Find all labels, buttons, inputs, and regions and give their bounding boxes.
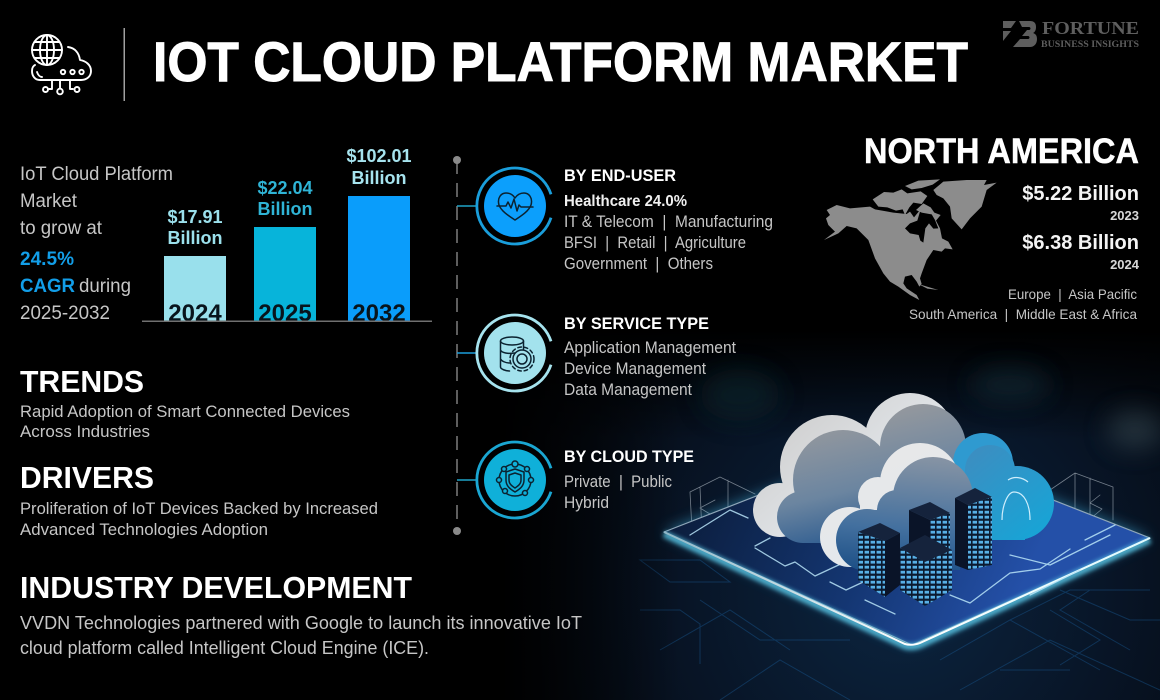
text: by cloud type: Private | Public bbox=[564, 472, 672, 491]
industry development: VVDN Technologies partnered with Google to launch its innovative IoT bbox=[20, 613, 582, 633]
text: by cloud type: BY CLOUD TYPE bbox=[564, 447, 694, 466]
stat: 2023: 2023 bbox=[1110, 208, 1139, 223]
platform bbox=[664, 440, 1150, 647]
server tower front bbox=[900, 535, 952, 606]
server tower left bbox=[858, 523, 900, 597]
server tower right bbox=[955, 488, 992, 570]
drivers bbox=[20, 460, 378, 539]
text: by service type: Data Management bbox=[564, 380, 692, 399]
circuit traces bbox=[690, 510, 1115, 614]
logo: Fortune Business Insights bbox=[1003, 18, 1139, 50]
text: by cloud type bbox=[564, 447, 694, 512]
bar chart: market size bbox=[142, 146, 432, 327]
heading: north america: NORTH AMERICA bbox=[864, 132, 1139, 171]
bar 2032 bbox=[348, 196, 410, 327]
value 2032: Billion bbox=[352, 168, 406, 188]
industry development: cloud platform called Intelligent Cloud Engine (ICE). bbox=[20, 638, 429, 658]
stat: 2023: $5.22 Billion bbox=[1022, 183, 1139, 205]
value 2025: $22.04 bbox=[257, 178, 313, 198]
industry development: INDUSTRY DEVELOPMENT bbox=[20, 570, 412, 605]
stat: 2024: $6.38 Billion bbox=[1022, 232, 1139, 254]
illustration: cloud platform bbox=[664, 393, 1150, 647]
growth text block: CAGR bbox=[20, 276, 75, 297]
text: by end-user: Government | Others bbox=[564, 254, 713, 273]
stat: 2024 bbox=[1022, 232, 1140, 272]
bar 2024: 2024 bbox=[168, 300, 222, 327]
drivers: Advanced Technologies Adoption bbox=[20, 520, 268, 539]
map: north america bbox=[824, 179, 997, 300]
growth text block: 2025-2032 bbox=[20, 303, 110, 324]
value 2024: Billion bbox=[168, 228, 222, 248]
bar 2024 bbox=[164, 256, 226, 327]
bar 2032: 2032 bbox=[352, 300, 406, 327]
other regions: Europe | Asia Pacific bbox=[1008, 286, 1137, 302]
logo: Fortune Business Insights: FORTUNE bbox=[1042, 18, 1139, 38]
stat: 2023 bbox=[1022, 183, 1139, 223]
blue cloud bbox=[953, 433, 1054, 540]
icon: cloud type shield network bbox=[457, 442, 551, 518]
servers bbox=[858, 488, 992, 606]
text: by end-user: Healthcare 24.0% bbox=[564, 193, 687, 210]
icon: end-user heart bbox=[457, 168, 551, 244]
growth text block: to grow at bbox=[20, 218, 103, 239]
front cloud bbox=[820, 443, 973, 571]
growth text block: Market bbox=[20, 191, 78, 212]
title: IOT CLOUD PLATFORM MARKET bbox=[153, 30, 968, 93]
header divider bbox=[124, 28, 125, 101]
growth text block: during bbox=[79, 276, 131, 297]
text: by end-user: BFSI | Retail | Agriculture bbox=[564, 233, 746, 252]
trends: Across Industries bbox=[20, 422, 150, 441]
text: by end-user bbox=[564, 166, 773, 273]
back cloud bbox=[753, 393, 966, 543]
growth text block: IoT Cloud Platform bbox=[20, 164, 173, 185]
text: by service type: BY SERVICE TYPE bbox=[564, 314, 709, 333]
text: by end-user: BY END-USER bbox=[564, 166, 676, 185]
text: by service type bbox=[564, 314, 736, 399]
text: by service type: Device Management bbox=[564, 359, 706, 378]
value 2024 bbox=[167, 207, 223, 248]
stat: 2024: 2024 bbox=[1110, 257, 1140, 272]
other regions: South America | Middle East & Africa bbox=[909, 306, 1137, 322]
trends: TRENDS bbox=[20, 364, 144, 399]
value 2025 bbox=[257, 178, 313, 219]
industry development bbox=[20, 570, 582, 658]
wireframe boxes bbox=[690, 473, 1113, 535]
trends bbox=[20, 364, 350, 441]
text: by service type: Application Management bbox=[564, 338, 736, 357]
server tower back bbox=[909, 502, 950, 560]
growth text block bbox=[20, 164, 173, 324]
icon: service type database gear bbox=[457, 315, 551, 391]
text: by cloud type: Hybrid bbox=[564, 493, 609, 512]
text: by end-user: IT & Telecom | Manufacturing bbox=[564, 212, 773, 231]
trends: Rapid Adoption of Smart Connected Devices bbox=[20, 402, 350, 421]
value 2024: $17.91 bbox=[167, 207, 223, 227]
bar 2025: 2025 bbox=[258, 300, 312, 327]
value 2032: $102.01 bbox=[346, 146, 412, 166]
value 2032 bbox=[346, 146, 412, 188]
header icon: cloud network globe bbox=[32, 35, 91, 94]
timeline bbox=[453, 156, 461, 535]
drivers: DRIVERS bbox=[20, 460, 154, 495]
drivers: Proliferation of IoT Devices Backed by Increased bbox=[20, 499, 378, 518]
growth text block: 24.5% bbox=[20, 249, 74, 270]
other regions bbox=[909, 286, 1137, 322]
logo: Fortune Business Insights: BUSINESS INSIGHTS bbox=[1041, 40, 1139, 50]
value 2025: Billion bbox=[258, 199, 312, 219]
bar 2025 bbox=[254, 227, 316, 327]
